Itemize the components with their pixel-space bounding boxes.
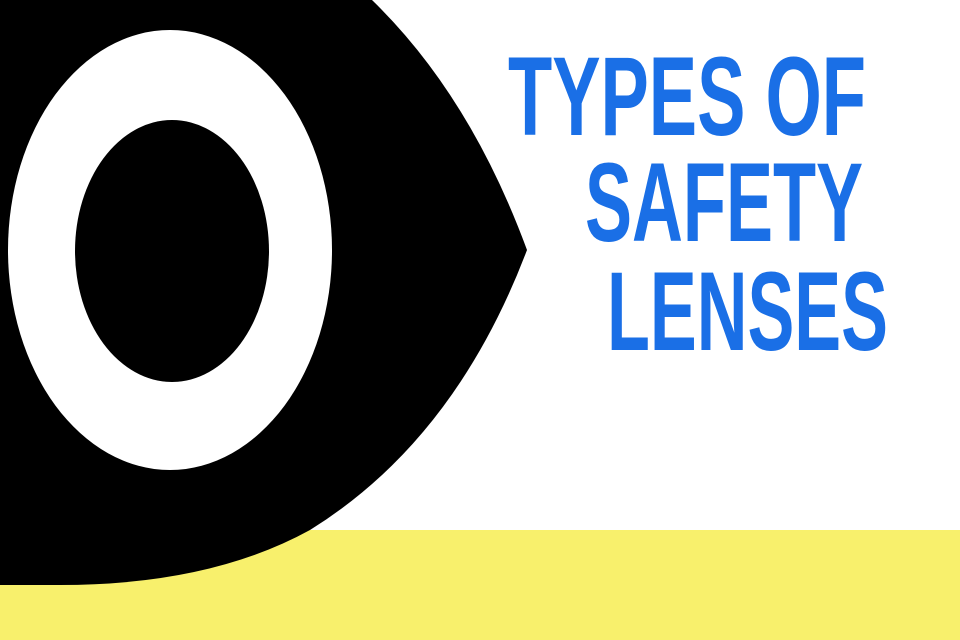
title [508,34,888,374]
icon: eye [0,0,527,585]
yellow band [0,530,960,640]
